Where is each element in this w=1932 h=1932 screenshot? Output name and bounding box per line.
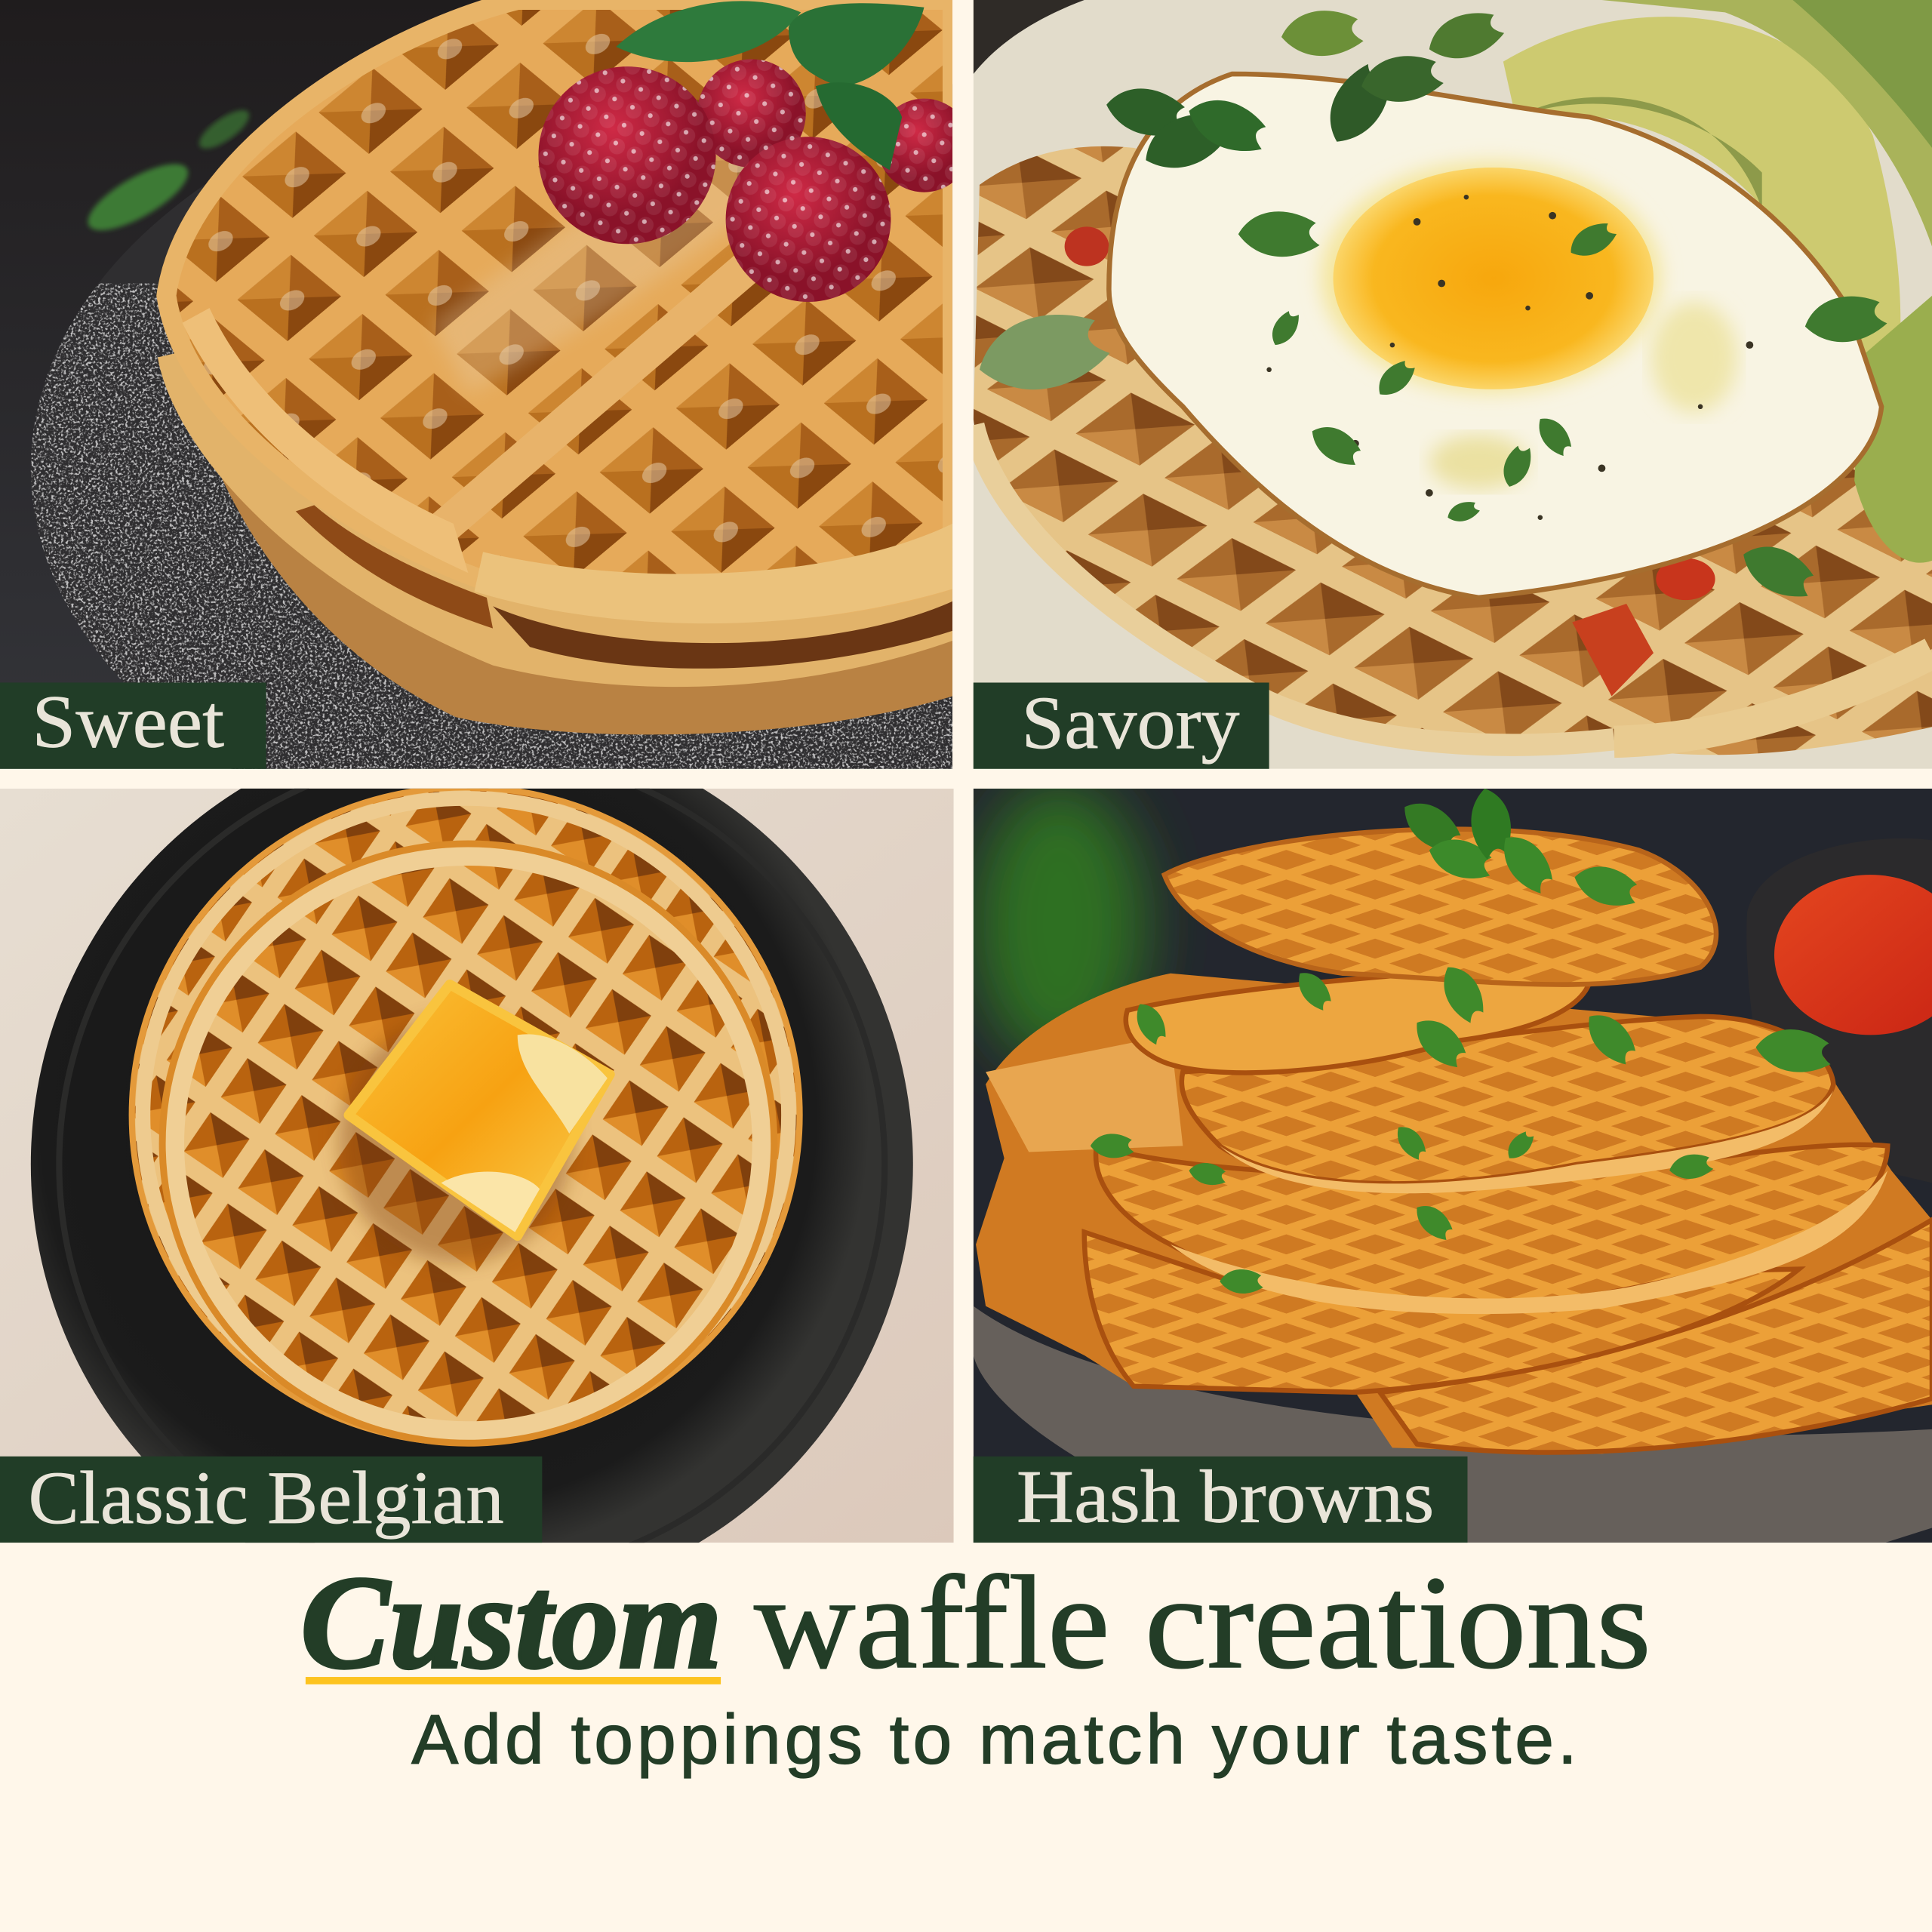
front waffle [163,844,774,1443]
back waffle [132,787,800,1443]
title: Custom [300,1549,722,1697]
title [300,1549,1651,1697]
panel: classic belgian waffle photo [0,788,954,1543]
title underline [306,1677,721,1684]
waffle top layer [166,0,952,623]
label: Sweet: Sweet [32,679,224,763]
subtitle: Add toppings to match your taste. [411,1700,1577,1778]
stacked hash browns [976,829,1932,1454]
panel: hash browns photo [974,783,1932,1543]
label: Sweet [0,679,266,769]
parsley [1091,785,1833,1294]
panel: savory waffle photo [971,0,1932,769]
sauce bowl [1774,875,1932,1035]
title: waffle creations [754,1549,1651,1697]
herbs on savory waffle [971,4,1889,606]
panel: sweet waffle photo [0,0,952,769]
label: Hash browns: Hash browns [1017,1454,1434,1538]
butter pat [349,984,610,1236]
mint and raspberries [538,1,971,302]
label: Savory: Savory [1021,681,1240,764]
label: Savory [974,681,1269,769]
plate [974,1306,1932,1543]
fried egg [1109,74,1881,598]
avocado [1503,0,1932,563]
label: Classic Belgian: Classic Belgian [29,1456,504,1540]
